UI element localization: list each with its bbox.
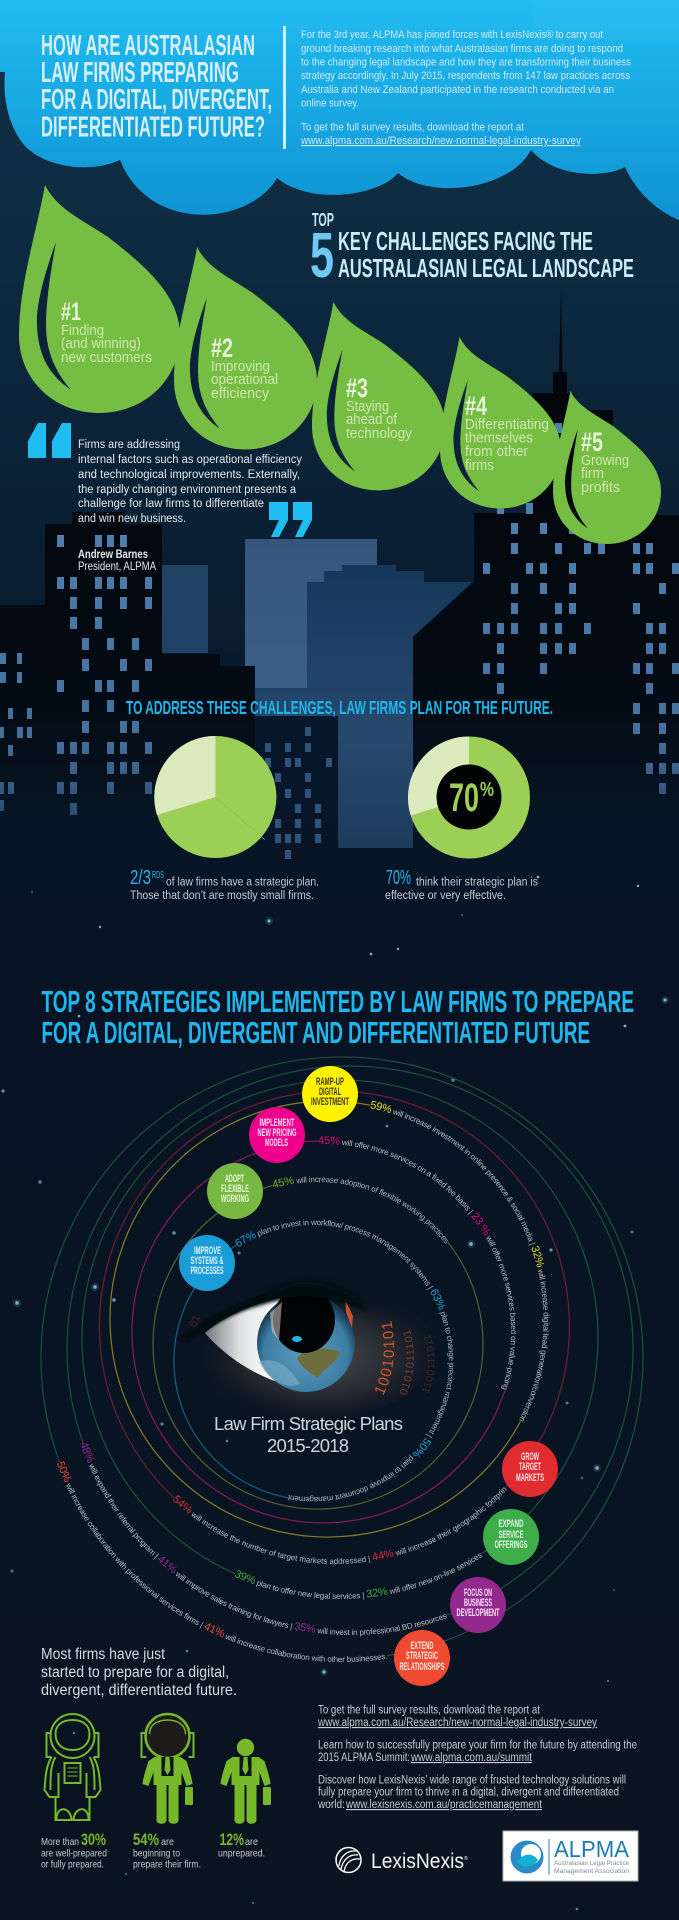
badge: adopt flexible working <box>207 1163 263 1219</box>
heading: top 5 key challenges: TOP <box>312 210 334 230</box>
caption: 54 percent: 54% <box>133 1830 159 1849</box>
leaf 5: growing firm profits: profits <box>581 480 620 496</box>
arc text: magenta: 45% will offer more services on a fixed fee basis | 23 % will offer more services based on value-pricing <box>318 1136 517 1390</box>
caption: 12 percent: unprepared. <box>218 1848 265 1860</box>
intro text: to the changing legal landscape and how they are transforming their business <box>301 56 631 68</box>
caption: 54 percent: prepare their firm. <box>133 1858 201 1870</box>
binary digits: 0101011101 <box>400 1330 414 1395</box>
leaf 3: staying ahead of technology: technology <box>346 426 413 442</box>
quote text: and technological improvements. Externally, <box>78 469 300 481</box>
statement: most firms: divergent, differentiated future. <box>41 1682 237 1699</box>
donut chart: 70 percent: 70 <box>449 776 479 820</box>
centre title <box>214 1413 403 1456</box>
donut chart: 70 percent: % <box>480 779 494 801</box>
call to action text <box>317 1704 637 1811</box>
title: DIFFERENTIATED FUTURE? <box>41 112 265 144</box>
badge: grow target markets <box>502 1441 558 1497</box>
arc text: green: 39% plan to offer new legal services | 32% will offer new on-line services <box>234 1554 482 1600</box>
figure: businessman unprepared <box>220 1739 271 1824</box>
call to action text: 2015 ALPMA Summit: <box>318 1752 410 1764</box>
call to action text: world: <box>317 1799 345 1811</box>
intro text: To get the full survey results, download the report at <box>301 122 524 134</box>
figure: astronaut fully prepared <box>44 1714 100 1820</box>
intro text <box>300 29 631 147</box>
title: FOR A DIGITAL, DIVERGENT, <box>41 84 272 116</box>
heading: top 8 strategies <box>42 984 634 1050</box>
mid building: pale blue <box>162 565 208 653</box>
badge: improve systems and processes: SYSTEMS & <box>190 1255 224 1267</box>
dim background windows <box>265 727 332 859</box>
pie chart: two thirds <box>154 736 276 858</box>
eye illustration <box>180 1280 434 1412</box>
leaf 2: improving operational efficiency: Improving <box>211 359 270 375</box>
leaf 5: growing firm profits: Growing <box>581 453 629 469</box>
logo: LexisNexis: ® <box>464 1855 468 1862</box>
call to action text: fully prepare your firm to thrive in a digital, divergent and differentiated <box>318 1786 619 1798</box>
binary digits: 01 <box>188 1313 203 1329</box>
leaf 3: staying ahead of technology: Staying <box>346 399 389 415</box>
caption: more than 30 percent: 30% <box>81 1830 106 1849</box>
caption: more than 30 percent: are well-prepared <box>41 1848 107 1860</box>
badge: expand service offerings <box>483 1509 539 1565</box>
badge: focus on business development <box>450 1577 506 1633</box>
binary digits: 1100111011 <box>422 1334 434 1393</box>
badge: implement new pricing models: IMPLEMENT <box>260 1117 295 1129</box>
badge: ramp-up digital investment: INVESTMENT <box>311 1096 349 1108</box>
intro text: ground breaking research into what Australasian firms are doing to respond <box>301 43 623 55</box>
intro text: strategy accordingly. In July 2015, respondents from 147 law practices across <box>301 70 630 82</box>
arc text: blue: 67% plan to invest in workflow/ process management systems | 63% plan to change precinct management | 50% plan to improve document management <box>235 1220 454 1502</box>
badge: extend strategic relationships: EXTEND <box>410 1640 434 1652</box>
call to action text: www.alpma.com.au/summit <box>410 1752 533 1764</box>
badge: implement new pricing models: MODELS <box>265 1137 288 1149</box>
badge: expand service offerings: OFFERINGS <box>494 1539 528 1551</box>
orbit rings <box>41 1057 643 1656</box>
leaf 1: finding new customers: (and winning) <box>61 336 141 352</box>
caption: two thirds: 2/3 <box>130 867 151 889</box>
call to action text: www.lexisnexis.com.au/practicemanagement <box>345 1799 543 1811</box>
iris earth <box>257 1294 355 1392</box>
leaf 4: differentiating themselves: #4 <box>465 391 487 421</box>
badge: ramp-up digital investment <box>302 1066 358 1122</box>
logo: ALPMA <box>503 1831 638 1881</box>
quote block <box>28 423 312 573</box>
badge: expand service offerings: EXPAND <box>498 1518 524 1530</box>
caption: 12 percent <box>218 1830 265 1860</box>
logo: LexisNexis: LexisNexis <box>371 1850 464 1873</box>
skyline silhouette: right <box>413 287 679 830</box>
badge: improve systems and processes: PROCESSES <box>190 1265 224 1277</box>
statement: most firms <box>41 1646 237 1699</box>
heading: top 5 key challenges: 5 <box>310 219 334 291</box>
quote text: Andrew Barnes <box>78 549 148 561</box>
leaf 5: growing firm profits: firm <box>581 466 604 482</box>
upper eyelid and lashes <box>178 1289 368 1340</box>
icon: opening quote marks <box>28 423 71 458</box>
lit windows <box>0 423 679 815</box>
cloud header <box>0 0 679 220</box>
sclera <box>205 1296 300 1388</box>
arc text: olive: 45% will increase adoption of flexible working practices <box>273 1176 448 1244</box>
caption: two thirds <box>130 867 319 902</box>
badge: extend strategic relationships: RELATIONSHIPS <box>400 1661 444 1673</box>
logo: ALPMA: ALPMA <box>554 1836 630 1862</box>
arc text: orange: 50% will increase collaboration with professional services firms | 41% will increase collaboration with other businesses. <box>57 1461 387 1662</box>
caption: more than 30 percent: or fully prepared. <box>41 1858 104 1870</box>
badge: adopt flexible working: WORKING <box>221 1193 249 1205</box>
eye surrounding skin <box>165 1278 435 1422</box>
title <box>41 30 272 144</box>
leaf 4: differentiating themselves: from other <box>465 444 528 460</box>
badge: focus on business development: DEVELOPMENT <box>456 1607 500 1619</box>
logo: LexisNexis <box>336 1848 468 1873</box>
badge: ramp-up digital investment: RAMP-UP <box>316 1076 344 1088</box>
intro text: For the 3rd year, ALPMA has joined forces with LexisNexis® to carry out <box>301 29 603 41</box>
leaf 3: staying ahead of technology <box>312 302 445 490</box>
leaf 4: differentiating themselves <box>440 337 561 508</box>
caption: 70 percent: effective or very effective. <box>385 890 506 902</box>
binary digits <box>188 1313 434 1395</box>
caption: two thirds: RDS <box>152 870 164 881</box>
badge: extend strategic relationships <box>394 1630 450 1686</box>
badge: extend strategic relationships: STRATEGIC <box>406 1650 438 1662</box>
leaf 3: staying ahead of technology: ahead of <box>346 412 398 428</box>
caption: 70 percent <box>385 867 538 902</box>
badge: adopt flexible working: ADOPT <box>225 1173 244 1185</box>
statement: most firms: started to prepare for a digital, <box>41 1664 229 1681</box>
leaf 1: finding new customers <box>19 185 180 413</box>
header divider <box>283 26 286 149</box>
badge: focus on business development: FOCUS ON <box>464 1587 492 1599</box>
leaf 4: differentiating themselves: firms <box>465 458 494 474</box>
badge: focus on business development: BUSINESS <box>464 1597 492 1609</box>
arc text: red: 54% will increase the number of target markets addressed | 44% will increase their geographic footprint <box>173 1488 507 1564</box>
quote text: and win new business. <box>78 513 186 525</box>
leaf 5: growing firm profits <box>553 391 661 544</box>
caption: 12 percent: are <box>245 1836 258 1848</box>
mid building: light tower <box>245 539 377 700</box>
icon: closing quote marks <box>269 502 312 537</box>
leaf 2: improving operational efficiency <box>174 247 317 449</box>
leaf 4: differentiating themselves: themselves <box>465 430 533 446</box>
leaf 4: differentiating themselves: Differentiating <box>465 417 549 433</box>
skyline silhouette: left <box>0 512 255 830</box>
caption: 54 percent: are <box>161 1836 174 1848</box>
title: LAW FIRMS PREPARING <box>41 57 239 89</box>
logo: ALPMA: Management Association <box>554 1869 629 1875</box>
quote text: the rapidly changing environment presents a <box>78 484 297 496</box>
caption: 54 percent <box>133 1830 201 1870</box>
centre title: Law Firm Strategic Plans <box>214 1413 403 1434</box>
caption: more than 30 percent <box>41 1830 107 1870</box>
intro text: online survey. <box>301 98 359 110</box>
badge: grow target markets: GROW <box>521 1451 539 1463</box>
leaf 1: finding new customers: #1 <box>61 298 81 326</box>
donut chart: 70 percent <box>408 736 530 858</box>
call to action text: www.alpma.com.au/Research/new-normal-legal-industry-survey <box>317 1717 597 1729</box>
quote text: President, ALPMA <box>78 561 156 573</box>
badge: ramp-up digital investment: DIGITAL <box>319 1086 341 1098</box>
call to action text: To get the full survey results, download the report at <box>318 1704 541 1716</box>
logo: ALPMA: Australasian Legal Practice <box>554 1861 630 1867</box>
intro text: Australia and New Zealand participated in the research conducted via an <box>301 84 614 96</box>
leaf 2: improving operational efficiency: #2 <box>211 333 233 363</box>
caption: two thirds: of law firms have a strategic plan. <box>166 876 319 888</box>
caption: 70 percent: 70% <box>386 867 411 889</box>
leaf 2: improving operational efficiency: operational <box>211 372 278 388</box>
badge: grow target markets: TARGET <box>519 1461 541 1473</box>
leaf 3: staying ahead of technology: #3 <box>346 373 368 403</box>
leaf 2: improving operational efficiency: efficiency <box>211 386 270 402</box>
figure: businessman with helmet <box>142 1714 194 1824</box>
leaf 1: finding new customers: new customers <box>61 350 152 366</box>
leaf 1: finding new customers: Finding <box>61 323 104 339</box>
arc text: yellow: 59% will increase investment in online presence & social media | 32% will increase digital lead generation/conversion <box>370 1100 550 1422</box>
badge: adopt flexible working: FLEXIBLE <box>221 1183 249 1195</box>
cloud shape <box>0 0 679 220</box>
badge: improve systems and processes: IMPROVE <box>194 1245 221 1257</box>
quote text: Firms are addressing <box>78 439 180 451</box>
caption: two thirds: Those that don’t are mostly small firms. <box>130 890 314 902</box>
quote text <box>78 439 302 573</box>
badge: implement new pricing models: NEW PRICING <box>258 1127 296 1139</box>
badge: expand service offerings: SERVICE <box>498 1529 524 1541</box>
statement: most firms: Most firms have just <box>41 1646 166 1663</box>
caption: 70 percent: think their strategic plan is <box>416 876 538 888</box>
quote text: challenge for law firms to differentiate <box>78 498 264 510</box>
mid building: stepped dark tower <box>255 565 472 848</box>
arc text: purple: 48% will expand their referral program | 41% will improve sales training for lawyers | 35% will invest in professional BD resources <box>82 1442 447 1636</box>
pupil <box>273 1287 335 1353</box>
badge: improve systems and processes <box>179 1235 235 1291</box>
leaf 5: growing firm profits: #5 <box>581 427 603 457</box>
call to action text: Discover how LexisNexis’ wide range of trusted technology solutions will <box>318 1774 626 1786</box>
binary digits: 10010101 <box>375 1321 394 1395</box>
intro text: www.alpma.com.au/Research/new-normal-legal-industry-survey <box>300 135 581 147</box>
badge: grow target markets: MARKETS <box>516 1472 544 1484</box>
centre title: 2015-2018 <box>267 1435 349 1456</box>
city skyline <box>0 287 679 859</box>
heading: top 5 key challenges <box>310 210 634 291</box>
quote text: internal factors such as operational efficiency <box>78 454 302 466</box>
star field <box>1 876 668 1910</box>
caption: more than 30 percent: More than <box>41 1836 79 1848</box>
title: HOW ARE AUSTRALASIAN <box>41 30 255 62</box>
caption: 12 percent: 12% <box>220 1830 244 1849</box>
badge: implement new pricing models <box>249 1107 305 1163</box>
caption: 54 percent: beginning to <box>133 1848 180 1860</box>
